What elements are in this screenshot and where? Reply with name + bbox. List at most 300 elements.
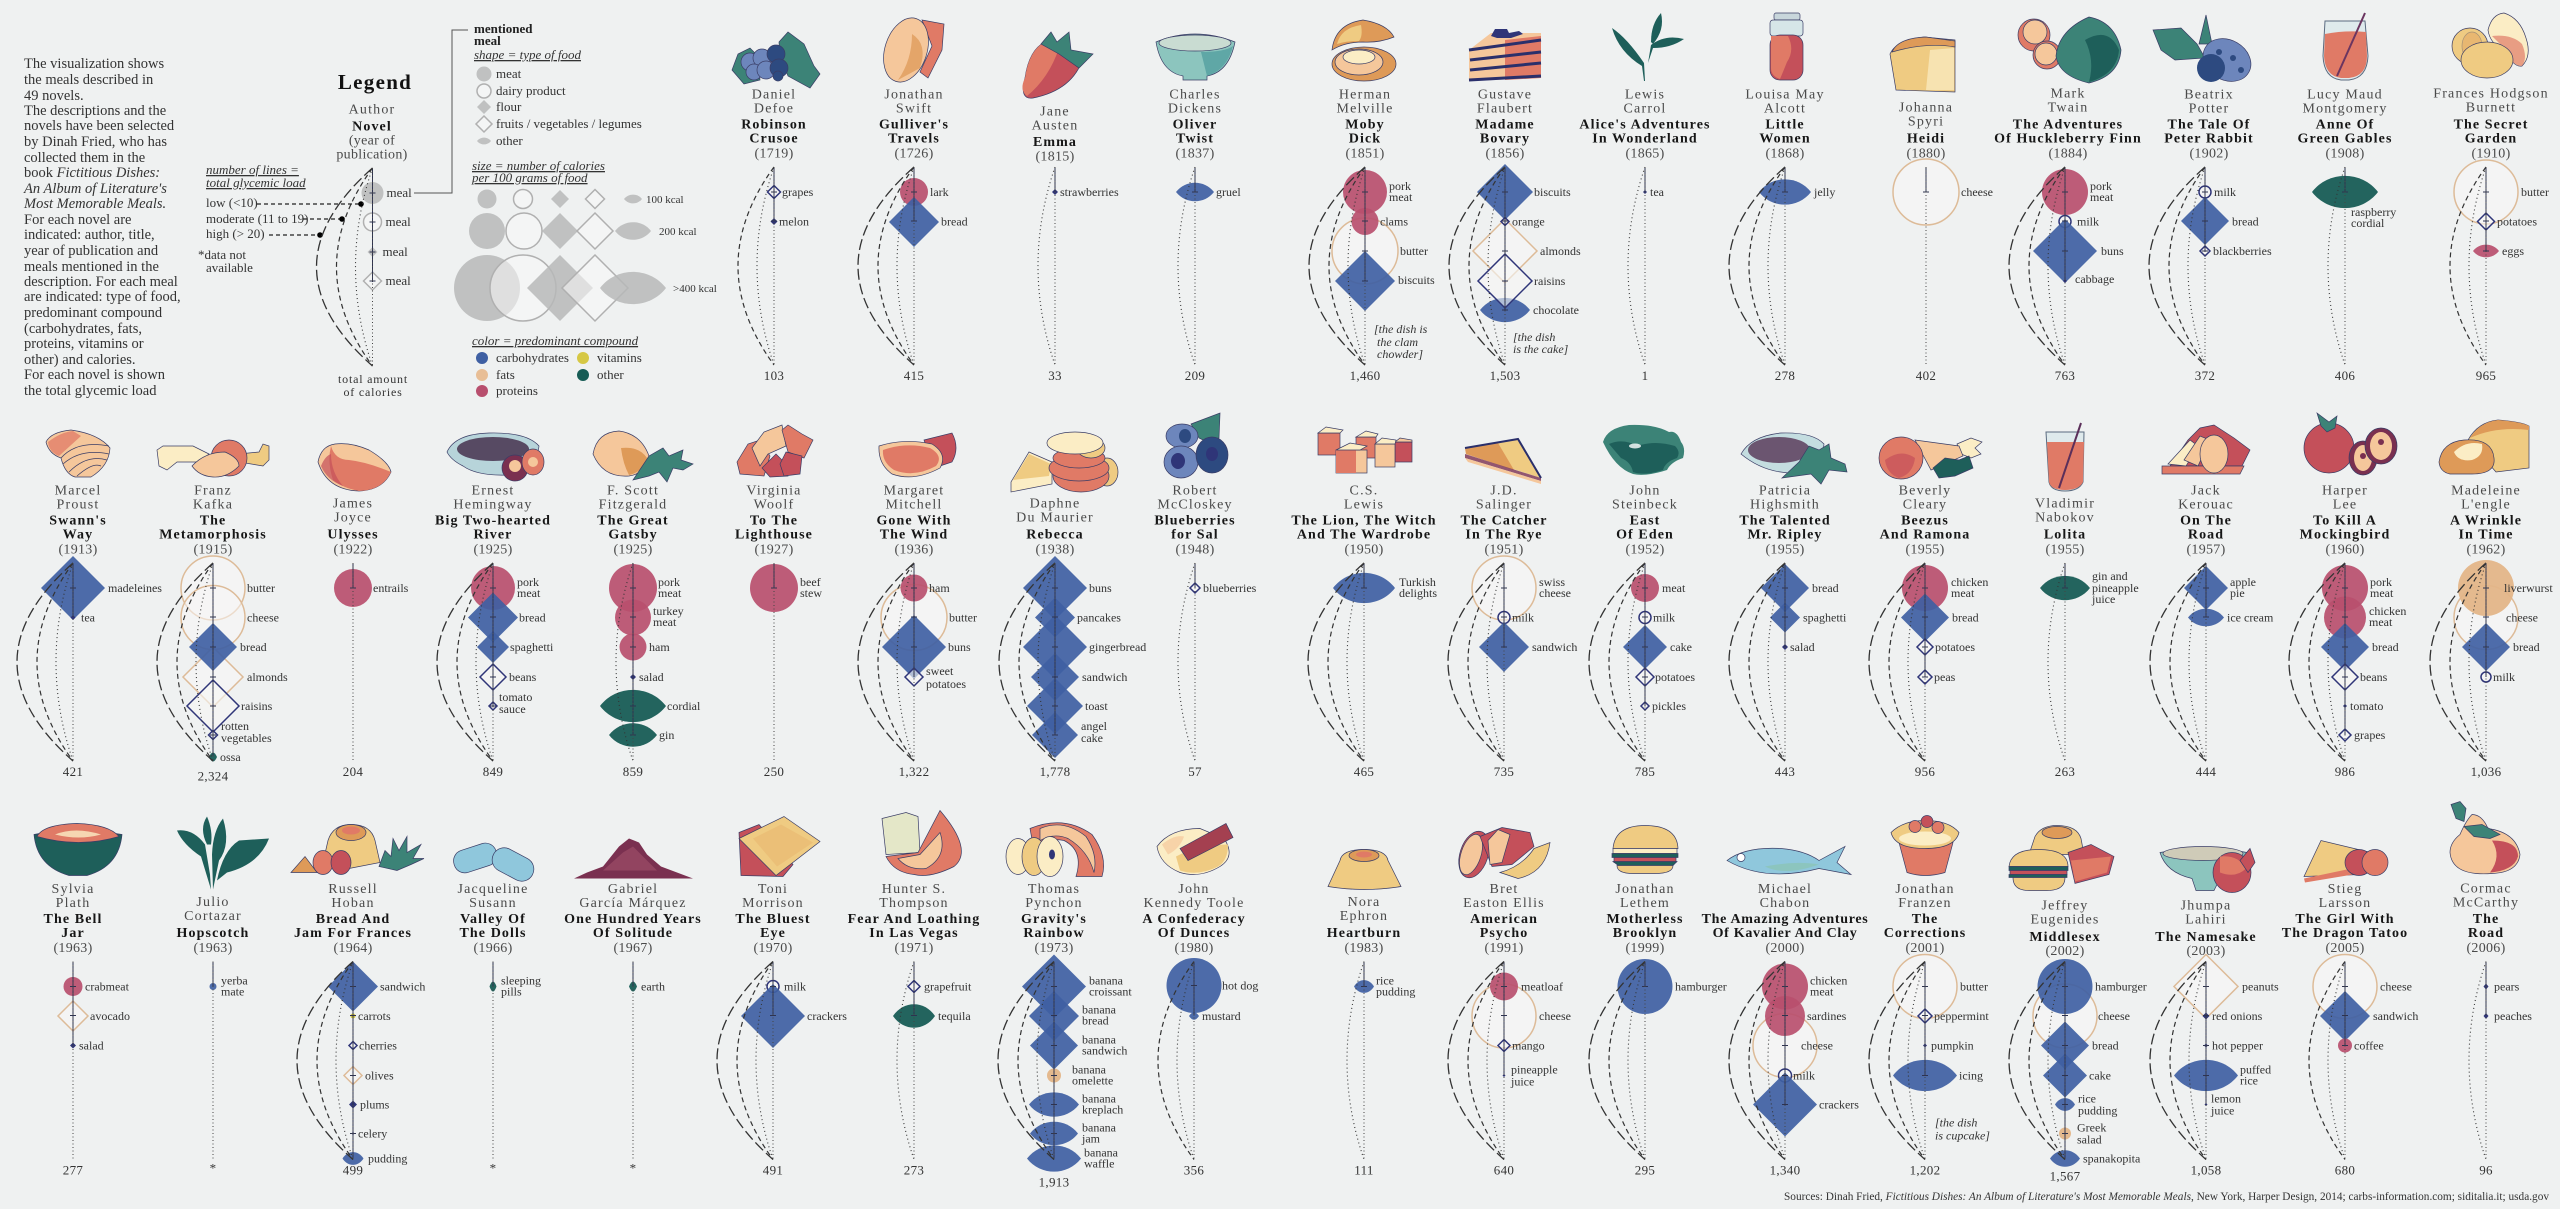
author: Mark xyxy=(2050,86,2086,102)
legend author and novel: publication) xyxy=(336,148,408,162)
novel: One Hundred Years Of Solitude xyxy=(564,838,702,1176)
glycemic arcs xyxy=(2009,962,2065,1160)
meal: tomato sauce xyxy=(489,690,532,716)
meal: chicken meat xyxy=(1762,964,1847,1010)
title: Crusoe xyxy=(749,132,799,146)
title: Blueberries xyxy=(1154,514,1236,528)
total calories: 372 xyxy=(2195,368,2215,383)
author: Michael xyxy=(1758,882,1812,897)
axis xyxy=(1192,167,1198,192)
title: Travels xyxy=(888,132,940,146)
total calories: 356 xyxy=(1184,1162,1204,1178)
meal: swiss cheese: cheese xyxy=(1539,586,1571,600)
glycemic arcs xyxy=(717,962,773,1160)
meal: apple pie: pie xyxy=(2230,586,2245,600)
title: Eye xyxy=(760,926,786,941)
legend author and novel: Author xyxy=(349,102,395,118)
axis xyxy=(1642,563,1648,706)
total calories: 1,322 xyxy=(899,764,929,779)
author: Jacqueline xyxy=(457,882,529,897)
illustration: entrails xyxy=(318,444,391,491)
meal: bread: bread xyxy=(2513,640,2540,654)
title: The Wind xyxy=(880,528,948,542)
meal: milk xyxy=(2059,214,2099,228)
total calories: 1,460 xyxy=(1350,368,1380,383)
legend mentioned meal: mentioned xyxy=(474,21,533,36)
meal: sandwich: sandwich xyxy=(1532,640,1577,654)
total calories: 1,778 xyxy=(1040,764,1070,779)
illustration: beef stew xyxy=(737,425,813,477)
title: Rainbow xyxy=(1023,926,1085,941)
author: Hoban xyxy=(331,896,375,911)
meal: pork meat: meat xyxy=(658,586,682,600)
illustration: tequila and grapefruit xyxy=(882,810,961,876)
year: (2002) xyxy=(2045,944,2085,959)
author: Du Maurier xyxy=(1016,510,1094,526)
meal: gin and pineapple juice: juice xyxy=(2091,592,2115,606)
meal: milk xyxy=(2481,670,2515,684)
title: Rebecca xyxy=(1026,528,1084,542)
novel: East Of Eden xyxy=(1589,425,1695,779)
illustration: bread and cheese xyxy=(2439,420,2529,474)
total calories: 640 xyxy=(1494,1162,1514,1178)
title: To Kill A xyxy=(2313,514,2377,528)
meal: potatoes xyxy=(1917,639,1975,655)
illustration: sleeping pills xyxy=(451,840,538,885)
meal: raisins: raisins xyxy=(1534,274,1566,288)
meal: angel cake: angel xyxy=(1081,719,1107,733)
author: Margaret xyxy=(884,484,944,498)
meal: entrails: entrails xyxy=(373,581,409,595)
meal: raspberry cordial: cordial xyxy=(2351,216,2385,230)
author: Daniel xyxy=(752,88,796,102)
meal: cheese xyxy=(1753,1014,1833,1078)
author: Patricia xyxy=(1759,484,1811,498)
legend example axis: meal xyxy=(382,244,408,259)
meal: milk xyxy=(1498,610,1534,624)
legend colour key: proteins xyxy=(496,383,538,398)
meal: banana kreplach: kreplach xyxy=(1082,1102,1123,1116)
total calories: 491 xyxy=(763,1162,783,1178)
meal: cordial: cordial xyxy=(667,699,701,713)
novel: The Girl With The Dragon Tattoo xyxy=(2282,840,2418,1178)
illustration: roast turkey xyxy=(593,431,693,482)
meal: lemon juice xyxy=(2204,1092,2241,1118)
total calories: 444 xyxy=(2196,764,2216,779)
meal: earth xyxy=(629,980,665,994)
meal: buns xyxy=(2033,219,2124,283)
meal: beef stew xyxy=(750,564,822,612)
meal: bread xyxy=(189,623,267,671)
total calories: 1,913 xyxy=(1039,1174,1069,1190)
glycemic arcs xyxy=(297,962,353,1160)
meal: ham: ham xyxy=(649,640,670,654)
glycemic arcs xyxy=(2150,563,2206,761)
meal: ham: ham xyxy=(929,581,950,595)
novel: Hopscotch xyxy=(177,816,269,1176)
novel: Alice's Adventures In Wonderland xyxy=(1579,13,1711,383)
meal: raisins xyxy=(1478,254,1566,308)
meal: milk: milk xyxy=(2077,214,2099,228)
author: Madeleine xyxy=(2451,484,2521,498)
meal: rotten vegetables xyxy=(208,719,272,745)
meal: tomato: tomato xyxy=(2350,699,2383,713)
total calories: 278 xyxy=(1775,368,1795,383)
author: Pynchon xyxy=(1025,896,1083,911)
glycemic arcs xyxy=(1869,563,1925,761)
axis xyxy=(2483,167,2489,251)
title: In Time xyxy=(2458,528,2514,542)
legend mentioned meal xyxy=(474,21,533,48)
note: clam chowder: the clam xyxy=(1377,335,1418,349)
note: cake: [the dish xyxy=(1513,330,1555,344)
meal: celery: celery xyxy=(358,1126,387,1140)
illustration: yerba mate leaves xyxy=(177,816,269,890)
title: Dick xyxy=(1349,132,1381,146)
year: (1957) xyxy=(2186,542,2226,558)
meal: buns: buns xyxy=(1089,581,1112,595)
year: (1910) xyxy=(2471,146,2511,162)
meal: banana omelette: banana xyxy=(1072,1062,1106,1076)
illustration: bowl xyxy=(1156,34,1235,80)
illustration: apple and cheese xyxy=(157,440,269,477)
novel: The Secret Garden xyxy=(2433,13,2549,383)
meal: milk xyxy=(1778,1068,1815,1082)
author: Proust xyxy=(56,498,100,512)
intro text: The descriptions and the xyxy=(24,103,166,119)
legend size key: >400 kcal xyxy=(673,283,717,295)
glycemic arcs xyxy=(2150,962,2206,1160)
meal: potatoes: potatoes xyxy=(2497,214,2537,228)
glycemic arcs xyxy=(1038,167,1055,365)
meal: milk: milk xyxy=(2214,185,2236,199)
total calories: 1,503 xyxy=(1490,368,1520,383)
meal: pineapple juice xyxy=(1502,1062,1558,1088)
title: Robinson xyxy=(741,118,807,132)
meal: sleeping pills: sleeping xyxy=(501,974,541,988)
meal: pickles: pickles xyxy=(1652,699,1686,713)
title: The Talented xyxy=(1739,514,1831,528)
total calories: 965 xyxy=(2476,368,2496,383)
author: Beverly xyxy=(1899,484,1951,498)
meal: bread: bread xyxy=(519,610,546,624)
meal: milk: milk xyxy=(1653,610,1675,624)
glycemic arcs xyxy=(2009,167,2065,365)
novel: Beezus And Ramona xyxy=(1869,437,1988,779)
meal: blueberries: blueberries xyxy=(1203,581,1257,595)
year: (1868) xyxy=(1765,146,1805,162)
meal: bread: bread xyxy=(2092,1038,2119,1052)
title: Middlesex xyxy=(2029,930,2101,945)
author: Nabokov xyxy=(2035,510,2095,526)
meal: banana kreplach xyxy=(1029,1092,1123,1117)
title: The xyxy=(1912,912,1938,927)
title: Psycho xyxy=(1480,926,1528,941)
meal: bread xyxy=(889,197,968,247)
meal: pudding: pudding xyxy=(368,1152,407,1166)
legend connector to mentioned meal xyxy=(414,30,468,193)
meal: clams: clams xyxy=(1380,214,1408,228)
total calories: 499 xyxy=(343,1162,363,1178)
illustration: apple pie xyxy=(2162,425,2250,474)
novel: The Metamorphosis xyxy=(157,440,288,784)
legend colour key: fats xyxy=(496,367,515,382)
meal: butter xyxy=(1332,218,1428,284)
glycemic arcs xyxy=(1178,167,1195,365)
title: Of Eden xyxy=(1616,528,1674,542)
meal: butter: butter xyxy=(1400,244,1428,258)
title: In Las Vegas xyxy=(869,926,959,941)
meal: banana waffle: waffle xyxy=(1084,1156,1114,1170)
author: Morrison xyxy=(742,896,804,911)
meal: beans xyxy=(2332,664,2388,690)
meal: milk xyxy=(767,980,806,994)
glycemic arcs xyxy=(437,563,493,761)
meal: yerba mate xyxy=(210,974,248,998)
meal: gingerbread xyxy=(1023,615,1146,679)
meal: spaghetti: spaghetti xyxy=(510,640,554,654)
meal: pork meat: pork xyxy=(1389,179,1411,193)
meal: peppermint: peppermint xyxy=(1934,1009,1989,1023)
axis xyxy=(632,962,634,986)
meal: gruel: gruel xyxy=(1216,185,1241,199)
meal: avocado xyxy=(58,1001,130,1031)
meal: ice cream xyxy=(2188,609,2274,626)
meal: bread xyxy=(2462,623,2540,671)
meal: pumpkin: pumpkin xyxy=(1931,1038,1974,1052)
meal: sandwich xyxy=(1031,653,1127,701)
author: Hunter S. xyxy=(882,882,946,897)
meal: rice pudding: rice xyxy=(1376,974,1394,988)
meal: swiss cheese: swiss xyxy=(1539,575,1565,589)
meal: olives: olives xyxy=(365,1068,394,1082)
title: Of Huckleberry Finn xyxy=(1994,132,2142,146)
meal: cheese xyxy=(181,586,279,650)
year: (1983) xyxy=(1344,941,1384,956)
meal: plums: plums xyxy=(360,1098,390,1112)
title: The Lion, The Witch xyxy=(1291,514,1437,528)
intro text: The visualization shows xyxy=(24,56,165,72)
legend shape key: shape = type of food xyxy=(474,47,581,62)
author: Harper xyxy=(2322,484,2368,498)
total calories: 111 xyxy=(1354,1162,1374,1178)
meal: strawberries: strawberries xyxy=(1060,185,1119,199)
meal: tomato sauce: sauce xyxy=(499,702,526,716)
total calories: 1,058 xyxy=(2191,1162,2221,1178)
glycemic arcs xyxy=(999,563,1055,761)
author: Joyce xyxy=(334,510,372,526)
meal: liverwurst: liverwurst xyxy=(2504,581,2553,595)
author: Salinger xyxy=(1476,498,1532,512)
meal: banana bread xyxy=(1029,991,1117,1041)
meal: cheese xyxy=(1893,159,1993,225)
meal: chocolate: chocolate xyxy=(1533,303,1579,317)
axis xyxy=(1642,962,1648,986)
axis xyxy=(770,962,776,1016)
novel: The Catcher In The Rye xyxy=(1448,439,1577,779)
axis xyxy=(1922,962,1928,1076)
illustration: grapes xyxy=(732,32,820,88)
illustration: broccoli xyxy=(1603,425,1684,475)
axis xyxy=(2483,563,2489,677)
illustration: jelly jar xyxy=(1770,13,1803,80)
meal: orange: orange xyxy=(1512,214,1545,228)
title: On The xyxy=(2180,514,2232,528)
glycemic arcs xyxy=(2048,563,2065,761)
meal: cheese: cheese xyxy=(1961,185,1993,199)
author: Defoe xyxy=(754,102,794,116)
meal: cheese: cheese xyxy=(247,610,279,624)
meal: apple pie: apple xyxy=(2230,575,2256,589)
title: Bread And xyxy=(316,912,390,927)
year: (1952) xyxy=(1625,542,1665,558)
illustration: earth pile xyxy=(574,838,693,878)
title: Heartburn xyxy=(1327,926,1401,941)
intro text: the total glycemic load xyxy=(24,383,157,399)
meal: pork meat: meat xyxy=(2370,586,2394,600)
intro text: collected them in the xyxy=(24,150,145,166)
novel: To Kill A Mockingbird xyxy=(2289,413,2406,779)
meal: banana croissant: banana xyxy=(1089,974,1123,988)
title: Valley Of xyxy=(460,912,526,927)
meal: banana bread: bread xyxy=(1082,1014,1109,1028)
title: Bovary xyxy=(1480,132,1530,146)
total calories: 1,567 xyxy=(2050,1168,2081,1184)
meal: peanuts: peanuts xyxy=(2242,980,2279,994)
axis xyxy=(1922,563,1928,677)
meal: sandwich xyxy=(1479,622,1577,672)
meal: coffee xyxy=(2338,1038,2384,1052)
total calories: 263 xyxy=(2055,764,2075,779)
meal: biscuits: biscuits xyxy=(1534,185,1571,199)
meal: pork meat: pork xyxy=(2090,179,2112,193)
glycemic arcs xyxy=(157,563,213,761)
glycemic arcs xyxy=(1158,962,1194,1160)
author: Mitchell xyxy=(885,498,943,512)
author: Austen xyxy=(1032,118,1078,134)
meal: rotten vegetables: vegetables xyxy=(221,731,272,745)
illustration: strawberry xyxy=(1022,32,1093,98)
author: Potter xyxy=(2189,102,2229,116)
axis xyxy=(911,167,917,221)
meal: cake: cake xyxy=(1670,640,1692,654)
meal: hamburger: hamburger xyxy=(2095,980,2147,994)
novel: The Bell Jar xyxy=(34,824,130,1178)
glycemic arcs xyxy=(2289,563,2345,761)
author: L'engle xyxy=(2461,498,2511,512)
meal: butter: butter xyxy=(949,610,977,624)
title: Big Two-hearted xyxy=(435,514,551,528)
year: (1948) xyxy=(1175,542,1215,558)
year: (1964) xyxy=(333,941,373,956)
total calories: 277 xyxy=(63,1162,83,1178)
meal: eggs: eggs xyxy=(2502,244,2524,258)
illustration: bowl of rice and pepper xyxy=(2160,846,2255,892)
meal: buns xyxy=(882,615,971,679)
meal: meatloaf xyxy=(1490,972,1563,1000)
meal: chocolate xyxy=(1480,298,1579,322)
year: (1999) xyxy=(1625,941,1665,956)
year: (1936) xyxy=(894,542,934,558)
meal: peas xyxy=(1918,670,1956,684)
total calories: 465 xyxy=(1354,764,1374,779)
meal: eggs xyxy=(2473,244,2524,258)
author: Swift xyxy=(896,102,932,116)
meal: raisins xyxy=(187,680,273,732)
meal: grapes xyxy=(768,185,814,199)
novel: To The Lighthouse xyxy=(735,425,822,779)
meal: cheese xyxy=(1472,984,1571,1048)
year: (1908) xyxy=(2325,146,2365,162)
legend size key: size = number of calories xyxy=(472,158,605,173)
legend shape key: dairy product xyxy=(496,83,566,98)
total calories: 735 xyxy=(1494,764,1514,779)
meal: banana sandwich: sandwich xyxy=(1082,1044,1127,1058)
meal: Greek salad: Greek xyxy=(2077,1120,2106,1134)
novel: Fear And Loathing In Las Vegas xyxy=(848,810,980,1178)
title: Gulliver's xyxy=(879,118,949,132)
novel: The Road xyxy=(2450,802,2532,1178)
novel: Rebecca xyxy=(999,432,1146,779)
meal: cheese: cheese xyxy=(2380,980,2412,994)
meal: pork meat: meat xyxy=(517,586,541,600)
novel: Gravity's Rainbow xyxy=(998,823,1132,1190)
year: (1927) xyxy=(754,542,794,558)
meal: sandwich xyxy=(328,962,425,1012)
meal: buns: buns xyxy=(948,640,971,654)
meal: cheese xyxy=(2454,586,2538,650)
legend glycemic key xyxy=(198,162,364,275)
year: (1960) xyxy=(2325,542,2365,558)
novel: Big Two-hearted River xyxy=(435,433,554,779)
total calories: 273 xyxy=(904,1162,924,1178)
meal: biscuits xyxy=(1335,251,1435,311)
meal: beef stew: stew xyxy=(800,586,822,600)
meal: Greek salad xyxy=(2059,1120,2106,1146)
author: Sylvia xyxy=(52,882,94,897)
author: Thomas xyxy=(1028,882,1080,897)
meal: gingerbread: gingerbread xyxy=(1089,640,1146,654)
meal: crabmeat xyxy=(64,977,130,996)
meal: cheese xyxy=(2033,984,2130,1048)
meal: sardines: sardines xyxy=(1807,1009,1847,1023)
meal: gin xyxy=(609,723,674,747)
legend glycemic key: *data not xyxy=(198,247,246,262)
title: Hopscotch xyxy=(177,926,249,941)
glycemic arcs xyxy=(2469,962,2486,1160)
meal: butter: butter xyxy=(2521,185,2549,199)
glycemic arcs xyxy=(1347,962,1364,1160)
meal: cake xyxy=(2043,1054,2111,1098)
legend size key xyxy=(454,158,717,321)
author: Fitzgerald xyxy=(599,498,667,512)
axis xyxy=(2485,962,2487,1016)
meal: meatloaf: meatloaf xyxy=(1521,980,1563,994)
year: (1991) xyxy=(1484,941,1524,956)
legend mentioned meal: meal xyxy=(474,33,501,48)
author: Hemingway xyxy=(453,498,533,512)
glycemic arcs xyxy=(2149,167,2205,365)
novel: American Psycho xyxy=(1448,827,1571,1178)
meal: toast xyxy=(1027,678,1108,734)
author: Twain xyxy=(2048,100,2088,116)
year: (1922) xyxy=(333,542,373,558)
glycemic arcs xyxy=(1309,167,1365,365)
meal: banana bread: banana xyxy=(1082,1002,1116,1016)
meal: grapefruit: grapefruit xyxy=(924,980,972,994)
axis xyxy=(1054,167,1056,192)
title: The Girl With xyxy=(2295,912,2395,927)
